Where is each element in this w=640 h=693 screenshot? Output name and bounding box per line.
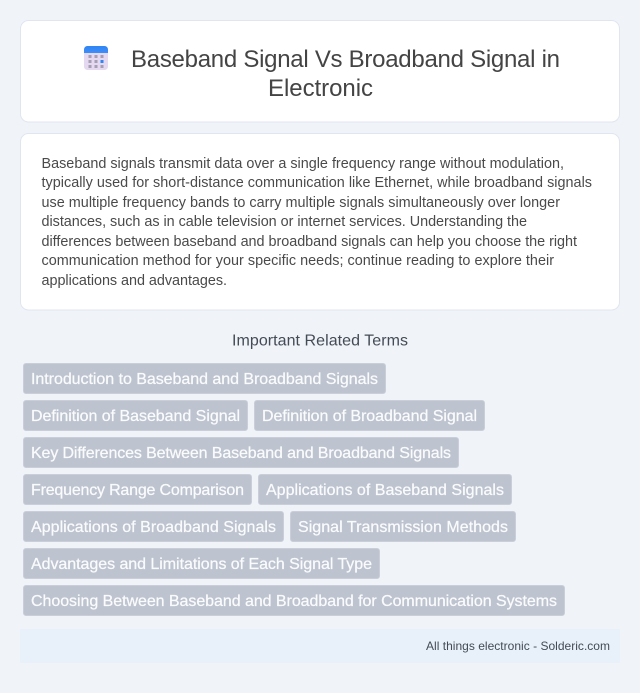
tag: Applications of Broadband Signals (31, 519, 276, 536)
footer: All things electronic - Solderic.com (426, 639, 610, 653)
tag (24, 586, 564, 616)
tag: Definition of Baseband Signal (31, 408, 240, 425)
heading: important related terms: Important Related Terms (232, 332, 408, 350)
footer (20, 629, 620, 663)
tag: Signal Transmission Methods (298, 519, 508, 536)
description text: distances, such as in cable television or internet services. Understanding the (42, 214, 527, 230)
title: Baseband Signal Vs Broadband Signal in (131, 46, 560, 73)
description text: differences between baseband and broadband signals can help you choose the right (42, 234, 577, 250)
tag (24, 548, 380, 578)
tag (24, 364, 386, 394)
tag: Applications of Baseband Signals (266, 482, 504, 499)
tag: Definition of Broadband Signal (262, 408, 477, 425)
tag (24, 474, 252, 504)
panel: related term tags (24, 364, 564, 616)
tag: Advantages and Limitations of Each Signal Type (31, 556, 372, 573)
description text: Baseband signals transmit data over a single frequency range without modulation, (42, 156, 564, 172)
tag: Frequency Range Comparison (31, 482, 244, 499)
tag (258, 474, 512, 504)
tag (290, 512, 516, 542)
tag (24, 438, 458, 468)
tag (24, 512, 284, 542)
title: Electronic (268, 75, 373, 102)
title (131, 46, 560, 102)
icon: calendar (84, 46, 108, 70)
panel: title card (20, 20, 620, 122)
tag: Key Differences Between Baseband and Broadband Signals (31, 445, 451, 462)
tag (24, 400, 248, 430)
description text: applications and advantages. (42, 273, 227, 289)
tag: Introduction to Baseband and Broadband Signals (31, 371, 378, 388)
tag: Choosing Between Baseband and Broadband for Communication Systems (31, 593, 557, 610)
description text: use multiple frequency bands to carry multiple signals simultaneously over longer (42, 195, 560, 211)
description text: typically used for short-distance communication like Ethernet, while broadband signals (42, 175, 592, 191)
panel: description (20, 134, 620, 310)
description text (42, 156, 592, 289)
description text: communication method for your specific needs; continue reading to explore their (42, 253, 554, 269)
tag (254, 400, 484, 430)
